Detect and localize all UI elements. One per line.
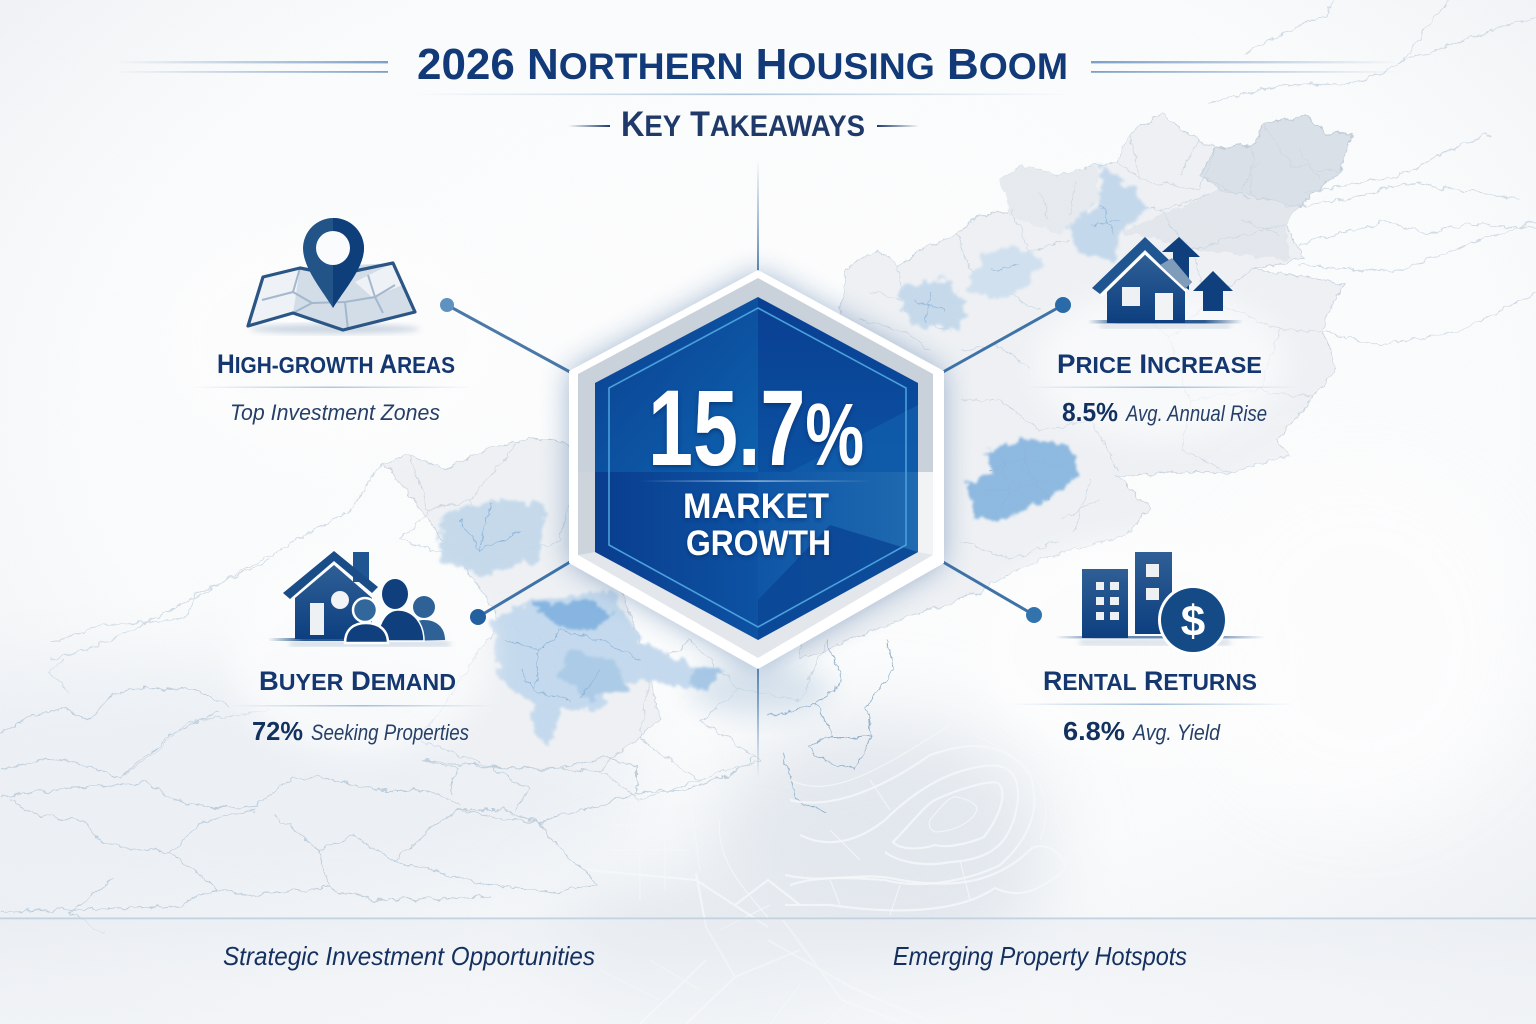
connector: buyer demand (470, 562, 570, 625)
hexagon shadow (569, 272, 943, 668)
heading: BUYER DEMAND (259, 666, 456, 696)
heading: RENTAL RETURNS (1043, 666, 1257, 696)
label: growth: GROWTH (686, 524, 831, 563)
label: market: MARKET (683, 487, 829, 526)
description: Avg. Annual Rise (1124, 401, 1267, 426)
map: lower-left landmass (383, 440, 827, 808)
person: middle (378, 579, 424, 641)
description: Top Investment Zones (230, 400, 440, 425)
connector: rental returns (943, 562, 1042, 623)
divider (1010, 704, 1295, 705)
value: 6.8%: 6.8% (1063, 716, 1125, 746)
connector: price increase (943, 297, 1071, 372)
heading: HIGH-GROWTH AREAS (217, 349, 455, 379)
icon: house with rising arrows (1088, 237, 1243, 328)
panel: rental returns (1010, 552, 1295, 746)
divider (190, 386, 475, 388)
person: right (405, 596, 445, 640)
icon: house with people (268, 551, 450, 646)
title rules (115, 61, 1401, 95)
panel: price increase (1025, 237, 1300, 427)
map: upper-right landmass (800, 114, 1352, 660)
footer text: left: Strategic Investment Opportunities (223, 941, 595, 971)
map: contour lines (785, 725, 1130, 915)
map: stronger blue hotspots (535, 438, 1078, 700)
icon: buildings with dollar coin (1055, 552, 1265, 655)
divider (230, 705, 495, 706)
map: district cell lines (460, 205, 1120, 700)
hexagon blue facets (595, 297, 918, 640)
title: 2026 NORTHERN HOUSING BOOM (417, 40, 1068, 89)
panel: buyer demand (230, 551, 495, 746)
headline value: 15.7% (648, 367, 864, 488)
description: Avg. Yield (1131, 720, 1221, 745)
hexagon grey bevel (578, 278, 933, 658)
panel: high-growth areas (190, 218, 475, 425)
icon: map with pin (248, 218, 420, 334)
hexagon white frame (569, 270, 944, 669)
map: street network (588, 800, 935, 1024)
value: 8.5%: 8.5% (1062, 397, 1118, 427)
map: pale blue districts (440, 165, 1148, 745)
footer band (0, 918, 1536, 1024)
icon: buildings with dollar coin: $ (1181, 597, 1205, 646)
divider (1025, 386, 1300, 388)
footer text: right: Emerging Property Hotspots (893, 941, 1187, 971)
connector: high-growth areas (440, 298, 570, 372)
hexagon divider (640, 480, 872, 482)
vertical spine lines (757, 160, 759, 778)
value: 72%: 72% (252, 716, 303, 746)
subtitle: KEY TAKEAWAYS (621, 105, 865, 144)
header (115, 40, 1401, 144)
heading: PRICE INCREASE (1057, 349, 1262, 379)
person: front (345, 598, 388, 643)
description: Seeking Properties (311, 720, 469, 745)
white halos behind labels (170, 230, 1530, 820)
central hexagon badge (569, 270, 944, 669)
hexagon inner outline (609, 308, 906, 627)
